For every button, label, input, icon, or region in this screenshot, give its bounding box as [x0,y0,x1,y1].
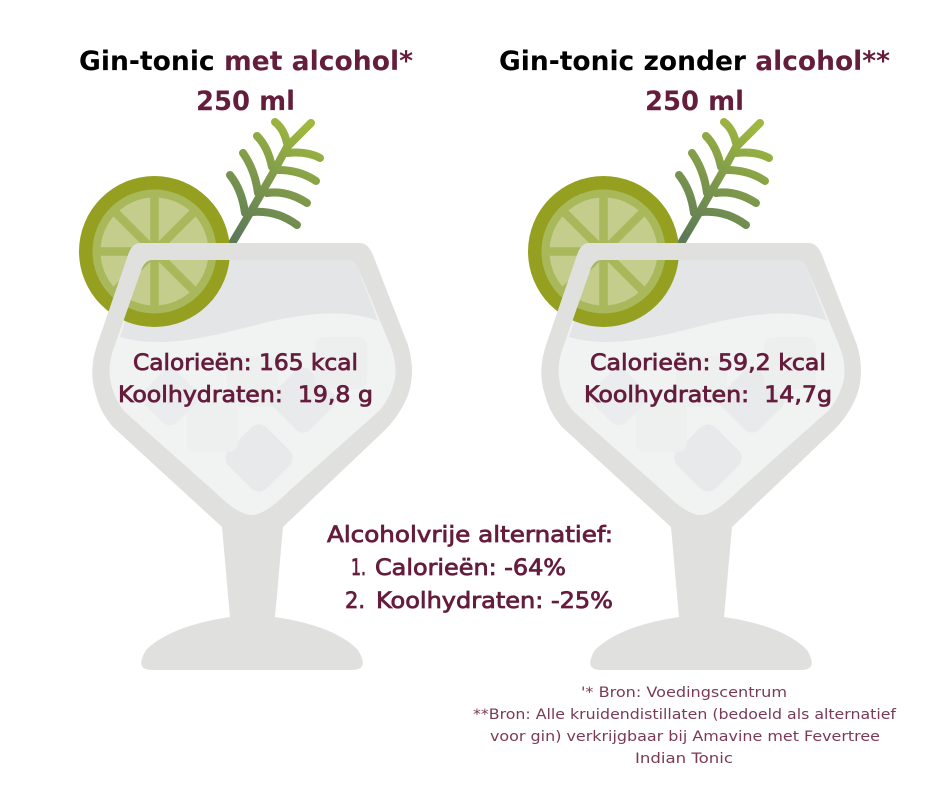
air space above drink [120,260,378,342]
stats: left drink: Calorieën: 165 kcal [133,350,358,376]
stats: right drink: Calorieën: 59,2 kcal [590,350,826,376]
footnote: sources: **Bron: Alle kruidendistillaten (bedoeld als alternatief [473,707,897,723]
footnote: sources: voor gin) verkrijgbaar bij Amavine met Fevertree [490,729,880,745]
title: left drink: Gin-tonic met alcohol* [79,46,413,77]
footnote: sources: Indian Tonic [635,751,733,767]
glass interior with drink [110,260,395,515]
lime slice [79,176,230,327]
stats: right drink [584,350,832,408]
comparison list: alcohol-free alternative: 2. [345,588,365,614]
illustration: left gin-tonic glass [79,122,412,670]
illustration: right gin-tonic glass [528,122,861,670]
ice cubes [137,337,367,496]
volume: left drink: 250 ml [196,86,295,117]
volume: right drink: 250 ml [645,86,744,117]
stats: left drink: Koolhydraten: 19,8 g [118,382,373,408]
comparison list: alcohol-free alternative: Koolhydraten: -25% [376,588,613,614]
comparison list: alcohol-free alternative: Alcoholvrije alternatief: [327,522,613,548]
glass frame, stem and foot [92,243,412,670]
footnote: sources [473,685,897,767]
stats: left drink [118,350,373,408]
comparison list: alcohol-free alternative [327,522,613,614]
rosemary sprig [228,122,320,250]
title: right drink: Gin-tonic zonder alcohol** [499,46,890,77]
comparison list: alcohol-free alternative: 1. [351,555,366,581]
comparison list: alcohol-free alternative: Calorieën: -64% [375,555,566,581]
footnote: sources: '* Bron: Voedingscentrum [581,685,787,701]
stats: right drink: Koolhydraten: 14,7g [584,382,832,408]
